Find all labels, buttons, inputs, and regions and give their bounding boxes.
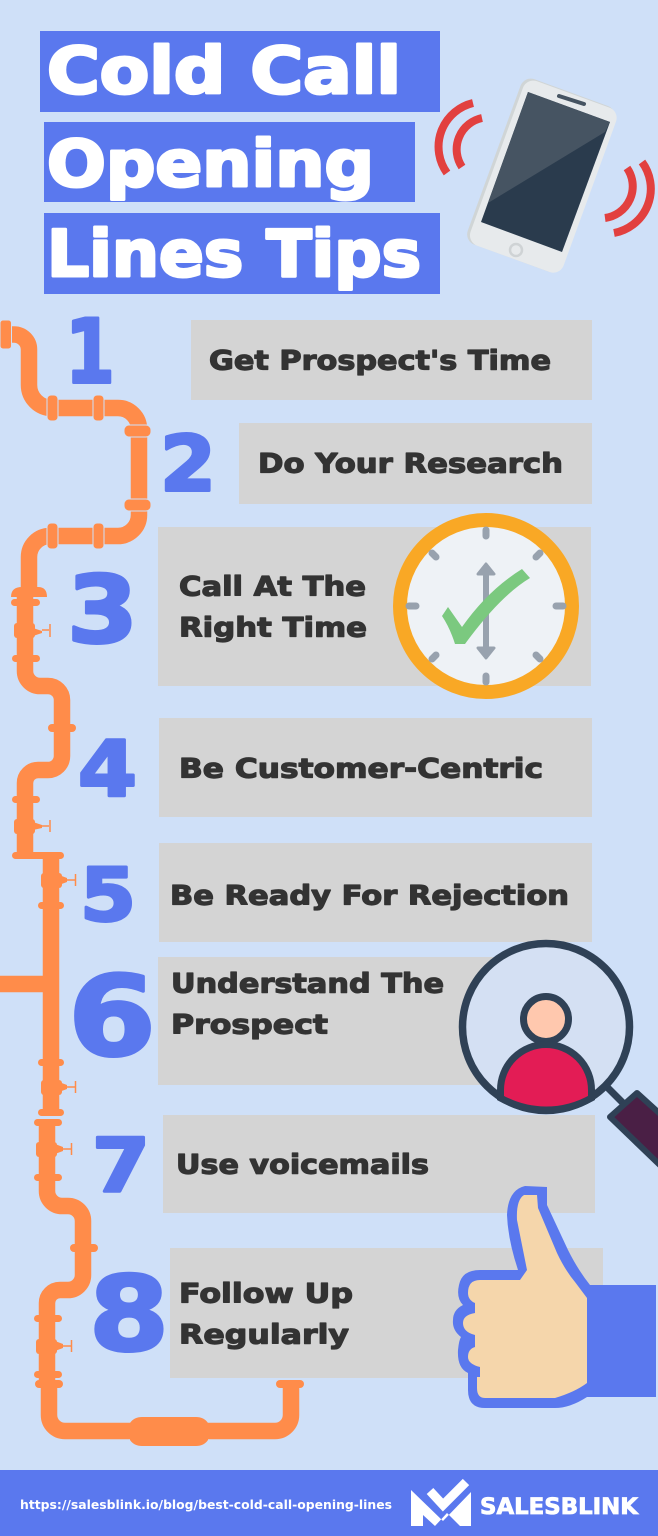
number 1: 1 bbox=[65, 300, 115, 404]
panel: step 6 bbox=[68, 953, 500, 1085]
title bbox=[40, 31, 440, 294]
panel: step 2: Do Your Research bbox=[258, 448, 563, 480]
footer bar bbox=[0, 1470, 658, 1536]
number 7: 7 bbox=[92, 1124, 150, 1210]
panel: step 3: Call At The bbox=[179, 572, 366, 602]
title: Lines Tips bbox=[47, 218, 421, 292]
panel: step 6: Prospect bbox=[171, 1010, 328, 1040]
number 3: 3 bbox=[67, 556, 138, 664]
panel: step 7 bbox=[92, 1115, 595, 1213]
panel: step 1: Get Prospect's Time bbox=[209, 346, 551, 376]
number 5: 5 bbox=[80, 854, 136, 938]
icon: clock with check mark bbox=[400, 520, 572, 692]
salesblink logo: SALESBLINK bbox=[480, 1495, 639, 1520]
icon: ringing smartphone bbox=[439, 76, 651, 276]
panel: step 8 bbox=[89, 1248, 603, 1378]
footer url: https://salesblink.io/blog/best-cold-call-opening-lines bbox=[20, 1498, 392, 1512]
panel: step 8: Regularly bbox=[179, 1320, 349, 1350]
panel: step 8: Follow Up bbox=[179, 1278, 353, 1310]
icon: magnifying glass with person bbox=[462, 944, 658, 1194]
salesblink logo bbox=[411, 1482, 639, 1526]
number 4: 4 bbox=[78, 726, 137, 814]
panel: step 3 bbox=[67, 520, 591, 692]
title: Cold Call bbox=[47, 35, 401, 109]
panel: step 3: Right Time bbox=[179, 612, 367, 644]
panel: step 7: Use voicemails bbox=[176, 1150, 429, 1180]
number 8: 8 bbox=[89, 1255, 169, 1375]
panel: step 1 bbox=[65, 300, 592, 404]
title: Opening bbox=[47, 128, 374, 202]
number 6: 6 bbox=[68, 953, 156, 1082]
panel: step 5: Be Ready For Rejection bbox=[170, 880, 569, 912]
icon: thumbs up bbox=[453, 1186, 656, 1408]
panel: step 4: Be Customer-Centric bbox=[179, 754, 543, 784]
panel: step 5 bbox=[80, 843, 592, 942]
panel: step 4 bbox=[78, 718, 592, 817]
pipeline bbox=[0, 320, 304, 1446]
panel: step 6: Understand The bbox=[171, 968, 444, 1000]
panel: step 2 bbox=[160, 420, 592, 510]
number 2: 2 bbox=[160, 420, 216, 510]
